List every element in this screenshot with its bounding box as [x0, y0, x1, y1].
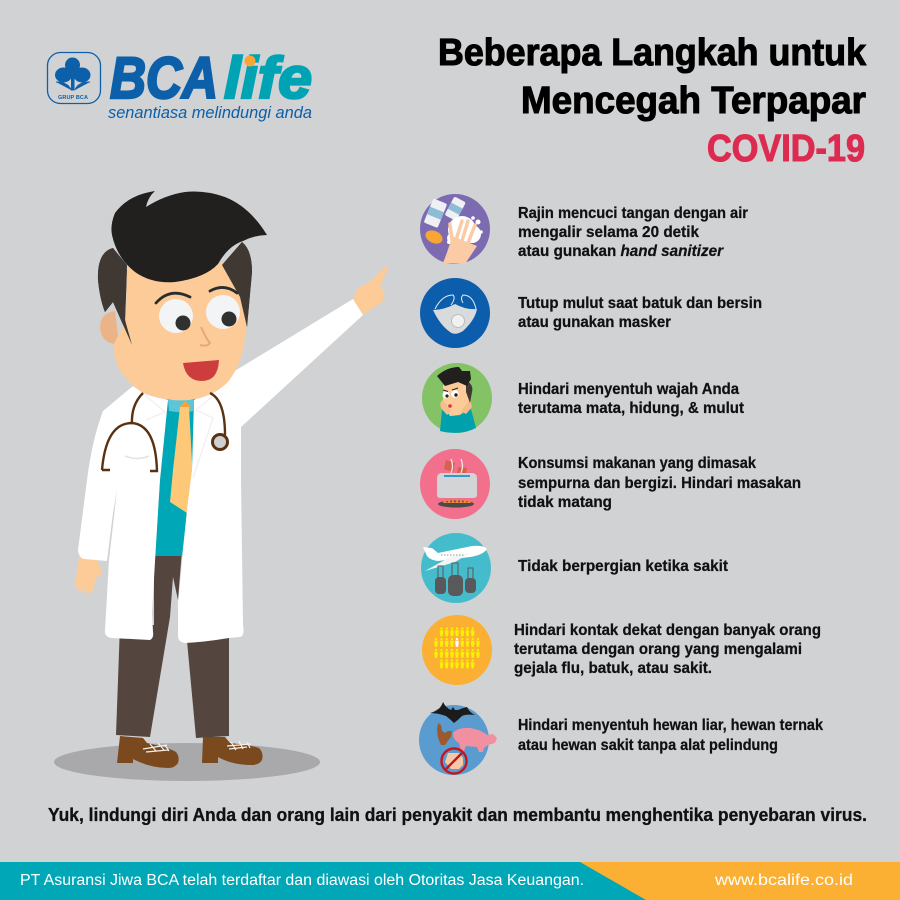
icon: washing hands — [420, 194, 490, 264]
logo wordmark life: life — [224, 46, 312, 111]
step 2 text — [518, 295, 762, 331]
step 5: no travel when sick — [421, 533, 728, 603]
step 5 text: Tidak berpergian ketika sakit — [518, 558, 728, 575]
icon: face mask — [420, 278, 490, 348]
step 1 text: mengalir selama 20 detik — [518, 224, 699, 241]
face — [114, 262, 248, 400]
step 1: wash hands — [420, 194, 748, 264]
logo dot — [244, 56, 256, 66]
icon: BCA emblem — [48, 52, 100, 104]
footer band — [0, 862, 900, 900]
logo wordmark BCA: BCA — [110, 46, 218, 111]
logo: BCA life — [48, 46, 312, 122]
doctor illustration — [54, 191, 388, 781]
step 1 text — [518, 205, 748, 260]
icon: boy touching face — [422, 363, 492, 433]
icon: airplane and luggage — [421, 533, 491, 603]
stethoscope — [102, 393, 228, 472]
step 7 text: atau hewan sakit tanpa alat pelindung — [518, 737, 778, 754]
step 4 text: sempurna dan bergizi. Hindari masakan — [518, 475, 801, 492]
step 3: avoid touching face — [422, 363, 744, 433]
footer disclaimer: PT Asuransi Jiwa BCA telah terdaftar dan diawasi oleh Otoritas Jasa Keuangan. — [20, 872, 584, 889]
step 6 text — [514, 622, 821, 677]
step 6: avoid crowds — [422, 615, 821, 685]
mouth — [183, 360, 219, 381]
hair — [111, 191, 267, 282]
step 4 text: Konsumsi makanan yang dimasak — [518, 455, 756, 472]
back hair — [98, 242, 252, 345]
left shoe — [117, 736, 179, 768]
closing message: Yuk, lindungi diri Anda dan orang lain dari penyakit dan membantu menghentika penyebaran virus. — [48, 805, 867, 825]
lab coat — [78, 299, 363, 643]
pointing hand — [353, 266, 388, 315]
step 7 text: Hindari menyentuh hewan liar, hewan ternak — [518, 717, 823, 734]
logo slogan: senantiasa melindungi anda — [108, 103, 312, 122]
title: Mencegah Terpapar — [521, 80, 866, 122]
step 6 text: terutama dengan orang yang mengalami — [514, 641, 802, 658]
title — [438, 32, 867, 170]
tie — [170, 401, 193, 513]
step 3 text — [518, 381, 744, 417]
title: COVID-19 — [707, 128, 865, 170]
ground shadow — [54, 743, 320, 781]
step 1 text: atau gunakan hand sanitizer — [518, 243, 724, 260]
icon: crowd of people — [422, 615, 492, 685]
eyes — [156, 287, 240, 333]
side hair in front of face — [98, 242, 252, 345]
step 4 text — [518, 455, 801, 511]
step 4: cooked food — [420, 449, 801, 519]
right shoe — [202, 737, 263, 765]
step 7: avoid animals — [419, 702, 823, 775]
step 2 text: atau gunakan masker — [518, 314, 671, 331]
footer orange panel — [580, 862, 900, 900]
left hand — [75, 557, 102, 597]
step 2: mask — [420, 278, 762, 348]
step 2 text: Tutup mulut saat batuk dan bersin — [518, 295, 762, 312]
step 7 text — [518, 717, 823, 754]
trousers — [116, 550, 229, 738]
ear — [100, 311, 119, 344]
step 4 text: tidak matang — [518, 494, 612, 511]
step 3 text: Hindari menyentuh wajah Anda — [518, 381, 739, 398]
title: Beberapa Langkah untuk — [438, 32, 867, 74]
step 1 text: Rajin mencuci tangan dengan air — [518, 205, 748, 222]
icon: cooking pot — [420, 449, 490, 519]
step 3 text: terutama mata, hidung, & mulut — [518, 400, 744, 417]
icon: bat, chicken, pig, no touching — [419, 702, 497, 775]
collar — [168, 400, 194, 413]
step 6 text: gejala flu, batuk, atau sakit. — [514, 660, 712, 677]
icon: BCA emblem: GRUP BCA — [58, 95, 88, 101]
step 6 text: Hindari kontak dekat dengan banyak orang — [514, 622, 821, 639]
shirt — [154, 398, 196, 556]
footer website: www.bcalife.co.id — [714, 872, 853, 889]
nose — [200, 327, 210, 346]
